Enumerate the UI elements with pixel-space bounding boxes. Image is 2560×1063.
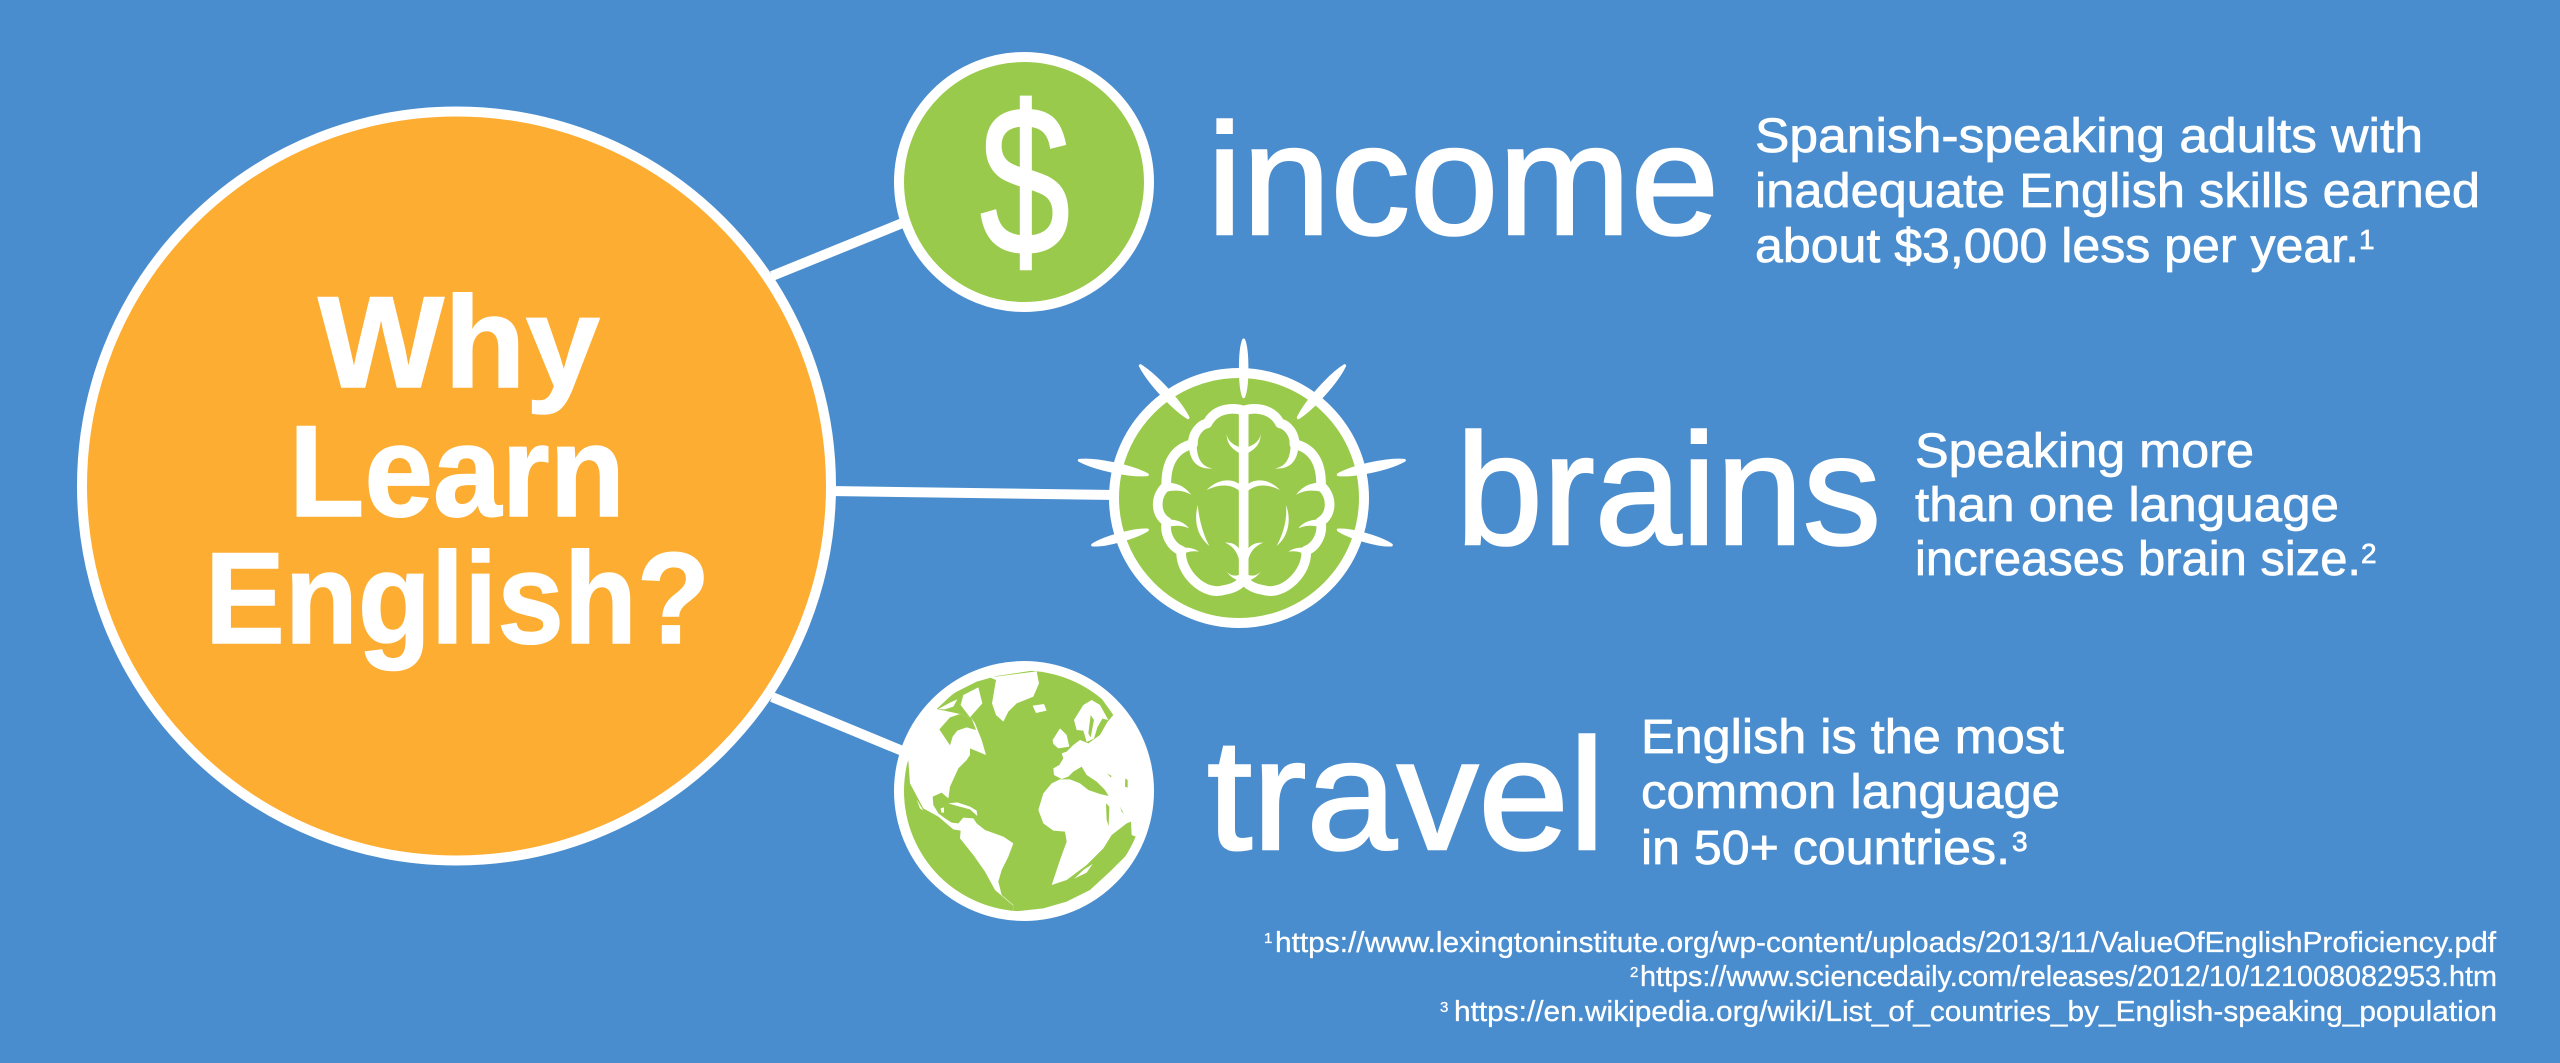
text block: brains description: than one language <box>1915 479 2339 532</box>
footnotes: 1 <box>1264 930 1272 947</box>
heading: travel: travel <box>1207 707 1605 883</box>
footnotes <box>1264 927 2497 1028</box>
text block: brains description: Speaking more <box>1915 425 2254 478</box>
heading: income: income <box>1207 92 1719 268</box>
text block: income description: 1 <box>2359 224 2375 255</box>
connector: main circle to travel <box>772 697 905 752</box>
text block: income description <box>1755 110 2480 273</box>
icon: globe <box>894 661 1154 921</box>
text block: income description: Spanish-speaking adults with <box>1755 110 2423 163</box>
footnotes: 3 <box>1440 999 1448 1016</box>
text block: travel description: in 50+ countries. <box>1641 822 2010 875</box>
heading: brains: brains <box>1456 402 1881 578</box>
footnotes: https://www.lexingtoninstitute.org/wp-content/uploads/2013/11/ValueOfEnglishProficiency.pdf <box>1275 927 2497 959</box>
title <box>205 269 710 671</box>
title: English? <box>205 525 710 671</box>
footnotes: 2 <box>1630 964 1638 981</box>
text block: travel description <box>1641 711 2064 875</box>
text block: travel description: common language <box>1641 766 2060 819</box>
icon: dollar sign in green circle: $ <box>980 63 1070 299</box>
text block: travel description: 3 <box>2012 826 2028 857</box>
connector: main circle to brains <box>830 491 1115 495</box>
text block: income description: about $3,000 less per year. <box>1755 220 2359 273</box>
footnotes: https://en.wikipedia.org/wiki/List_of_countries_by_English-speaking_population <box>1454 996 2497 1028</box>
text block: brains description: 2 <box>2361 538 2377 569</box>
connector: main circle to income <box>772 222 905 276</box>
panel: main orange circle with title <box>82 112 831 860</box>
text block: brains description <box>1915 425 2377 586</box>
icon: dollar sign in green circle <box>899 57 1149 307</box>
footnotes: https://www.sciencedaily.com/releases/2012/10/121008082953.htm <box>1640 961 2497 993</box>
brain drawing <box>1079 340 1404 591</box>
title: Learn <box>289 398 625 544</box>
text block: brains description: increases brain size. <box>1915 533 2361 586</box>
text block: travel description: English is the most <box>1641 711 2064 764</box>
title: Why <box>318 269 600 415</box>
text block: income description: inadequate English skills earned <box>1755 165 2480 218</box>
icon: brain with rays in green circle <box>1079 340 1404 623</box>
